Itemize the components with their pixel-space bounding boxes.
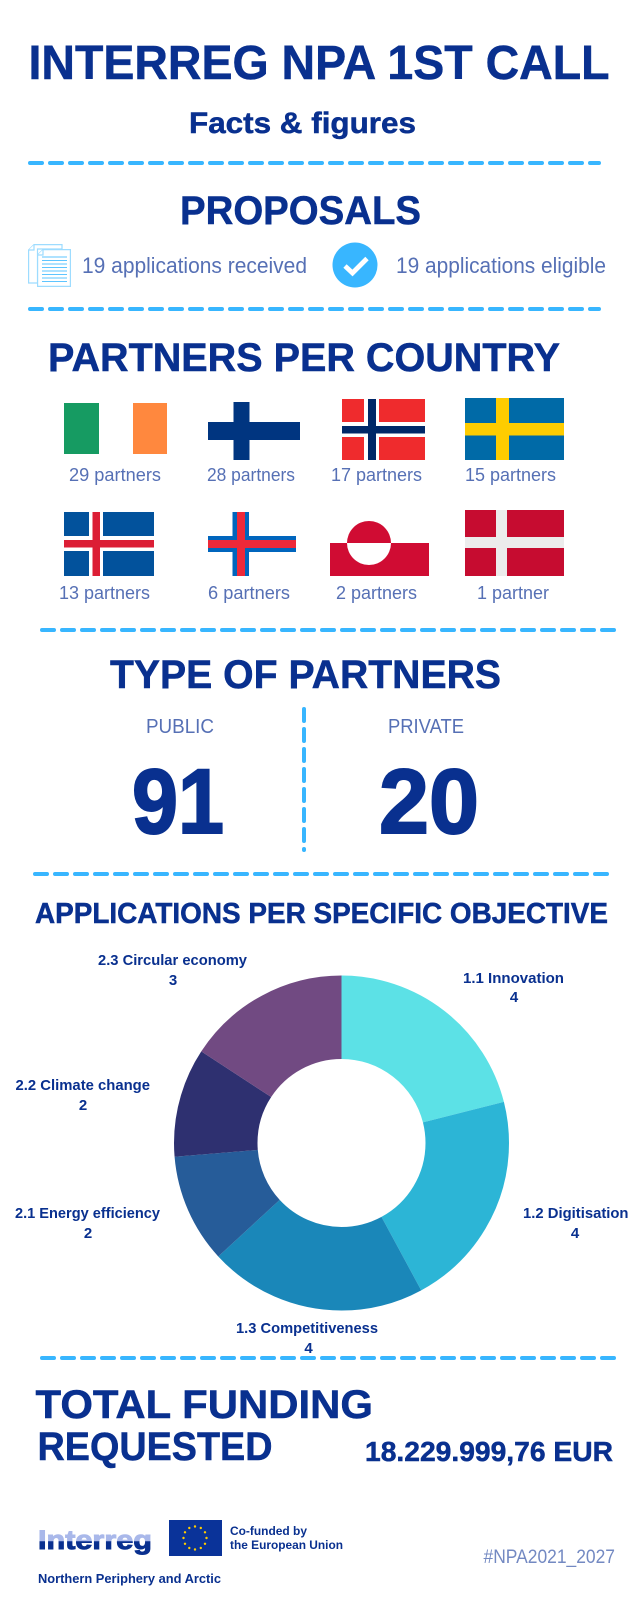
heading: total funding requested: TOTAL FUNDING	[36, 1383, 373, 1427]
heading: total funding requested: REQUESTED	[38, 1425, 272, 1469]
label: Greenland partners: 2 partners	[336, 583, 417, 603]
label: 2.1 energy efficiency	[15, 1205, 161, 1242]
label: 2.3 circular economy: 3	[169, 972, 177, 989]
value: private 20: 20	[379, 751, 479, 853]
label: 1.3 competitiveness	[236, 1320, 378, 1357]
label: 1.2 digitisation: 1.2 Digitisation	[523, 1205, 628, 1222]
label: Norway partners: 17 partners	[331, 465, 422, 485]
label: 1.1 innovation: 4	[510, 989, 519, 1006]
icon: documents	[29, 245, 70, 286]
label: 1.3 competitiveness: 1.3 Competitiveness	[236, 1320, 378, 1337]
label: 2.1 energy efficiency: 2.1 Energy efficiency	[15, 1205, 161, 1222]
flag: Iceland	[64, 512, 154, 576]
label: 2.3 circular economy	[98, 952, 248, 989]
text: Northern Periphery and Arctic: Northern Periphery and Arctic	[38, 1572, 221, 1586]
label: 2.2 climate change: 2.2 Climate change	[16, 1077, 150, 1094]
label: Ireland partners: 29 partners	[69, 465, 161, 485]
text: applications eligible: 19 applications eligible	[396, 253, 606, 278]
label: private: PRIVATE	[388, 716, 464, 738]
label: 1.2 digitisation: 4	[571, 1225, 580, 1242]
label: Denmark partners: 1 partner	[477, 583, 549, 603]
label: 1.1 innovation	[463, 970, 564, 1006]
label: 2.3 circular economy: 2.3 Circular economy	[98, 952, 248, 969]
label: 2.2 climate change: 2	[79, 1097, 87, 1114]
label: 2.1 energy efficiency: 2	[84, 1225, 92, 1242]
logo: EU flag	[169, 1520, 222, 1556]
value: total funding amount: 18.229.999,76 EUR	[365, 1436, 613, 1467]
label: Sweden partners: 15 partners	[465, 465, 556, 485]
heading: proposals: PROPOSALS	[180, 189, 421, 233]
flag: Faroe Islands	[208, 512, 296, 576]
label: 1.3 competitiveness: 4	[304, 1340, 313, 1357]
flag: Norway	[342, 399, 425, 460]
label: public: PUBLIC	[146, 716, 214, 738]
value: public 91: 91	[132, 751, 224, 853]
subtitle: Facts & figures	[189, 107, 416, 140]
logo: Interreg: Interreg	[38, 1525, 152, 1555]
donut chart	[216, 1017, 467, 1269]
label: 1.1 innovation: 1.1 Innovation	[463, 970, 564, 987]
icon: check mark	[332, 242, 378, 288]
heading: partners per country: PARTNERS PER COUNTRY	[48, 336, 560, 380]
title: INTERREG NPA 1ST CALL	[28, 37, 610, 90]
text: co-funded by the European Union	[230, 1524, 343, 1552]
flag: Denmark	[465, 510, 564, 576]
text: hashtag: #NPA2021_2027	[484, 1547, 615, 1568]
flag: Ireland	[64, 403, 167, 454]
heading: total funding requested	[36, 1383, 373, 1469]
label: 1.2 digitisation	[523, 1205, 628, 1242]
label: Finland partners: 28 partners	[207, 465, 295, 485]
heading: type of partners: TYPE OF PARTNERS	[110, 653, 501, 697]
label: 2.2 climate change	[16, 1077, 150, 1114]
text: co-funded by the European Union: Co-funded by	[230, 1524, 307, 1538]
flag: Greenland	[330, 521, 429, 576]
flag: Finland	[208, 402, 300, 460]
text: applications received: 19 applications received	[82, 253, 307, 278]
label: Iceland partners: 13 partners	[59, 583, 150, 603]
heading: applications per specific objective: APPLICATIONS PER SPECIFIC OBJECTIVE	[35, 898, 608, 930]
label: Faroe Islands partners: 6 partners	[208, 583, 290, 603]
flag: Sweden	[465, 398, 564, 460]
text: co-funded by the European Union: the European Union	[230, 1538, 343, 1552]
